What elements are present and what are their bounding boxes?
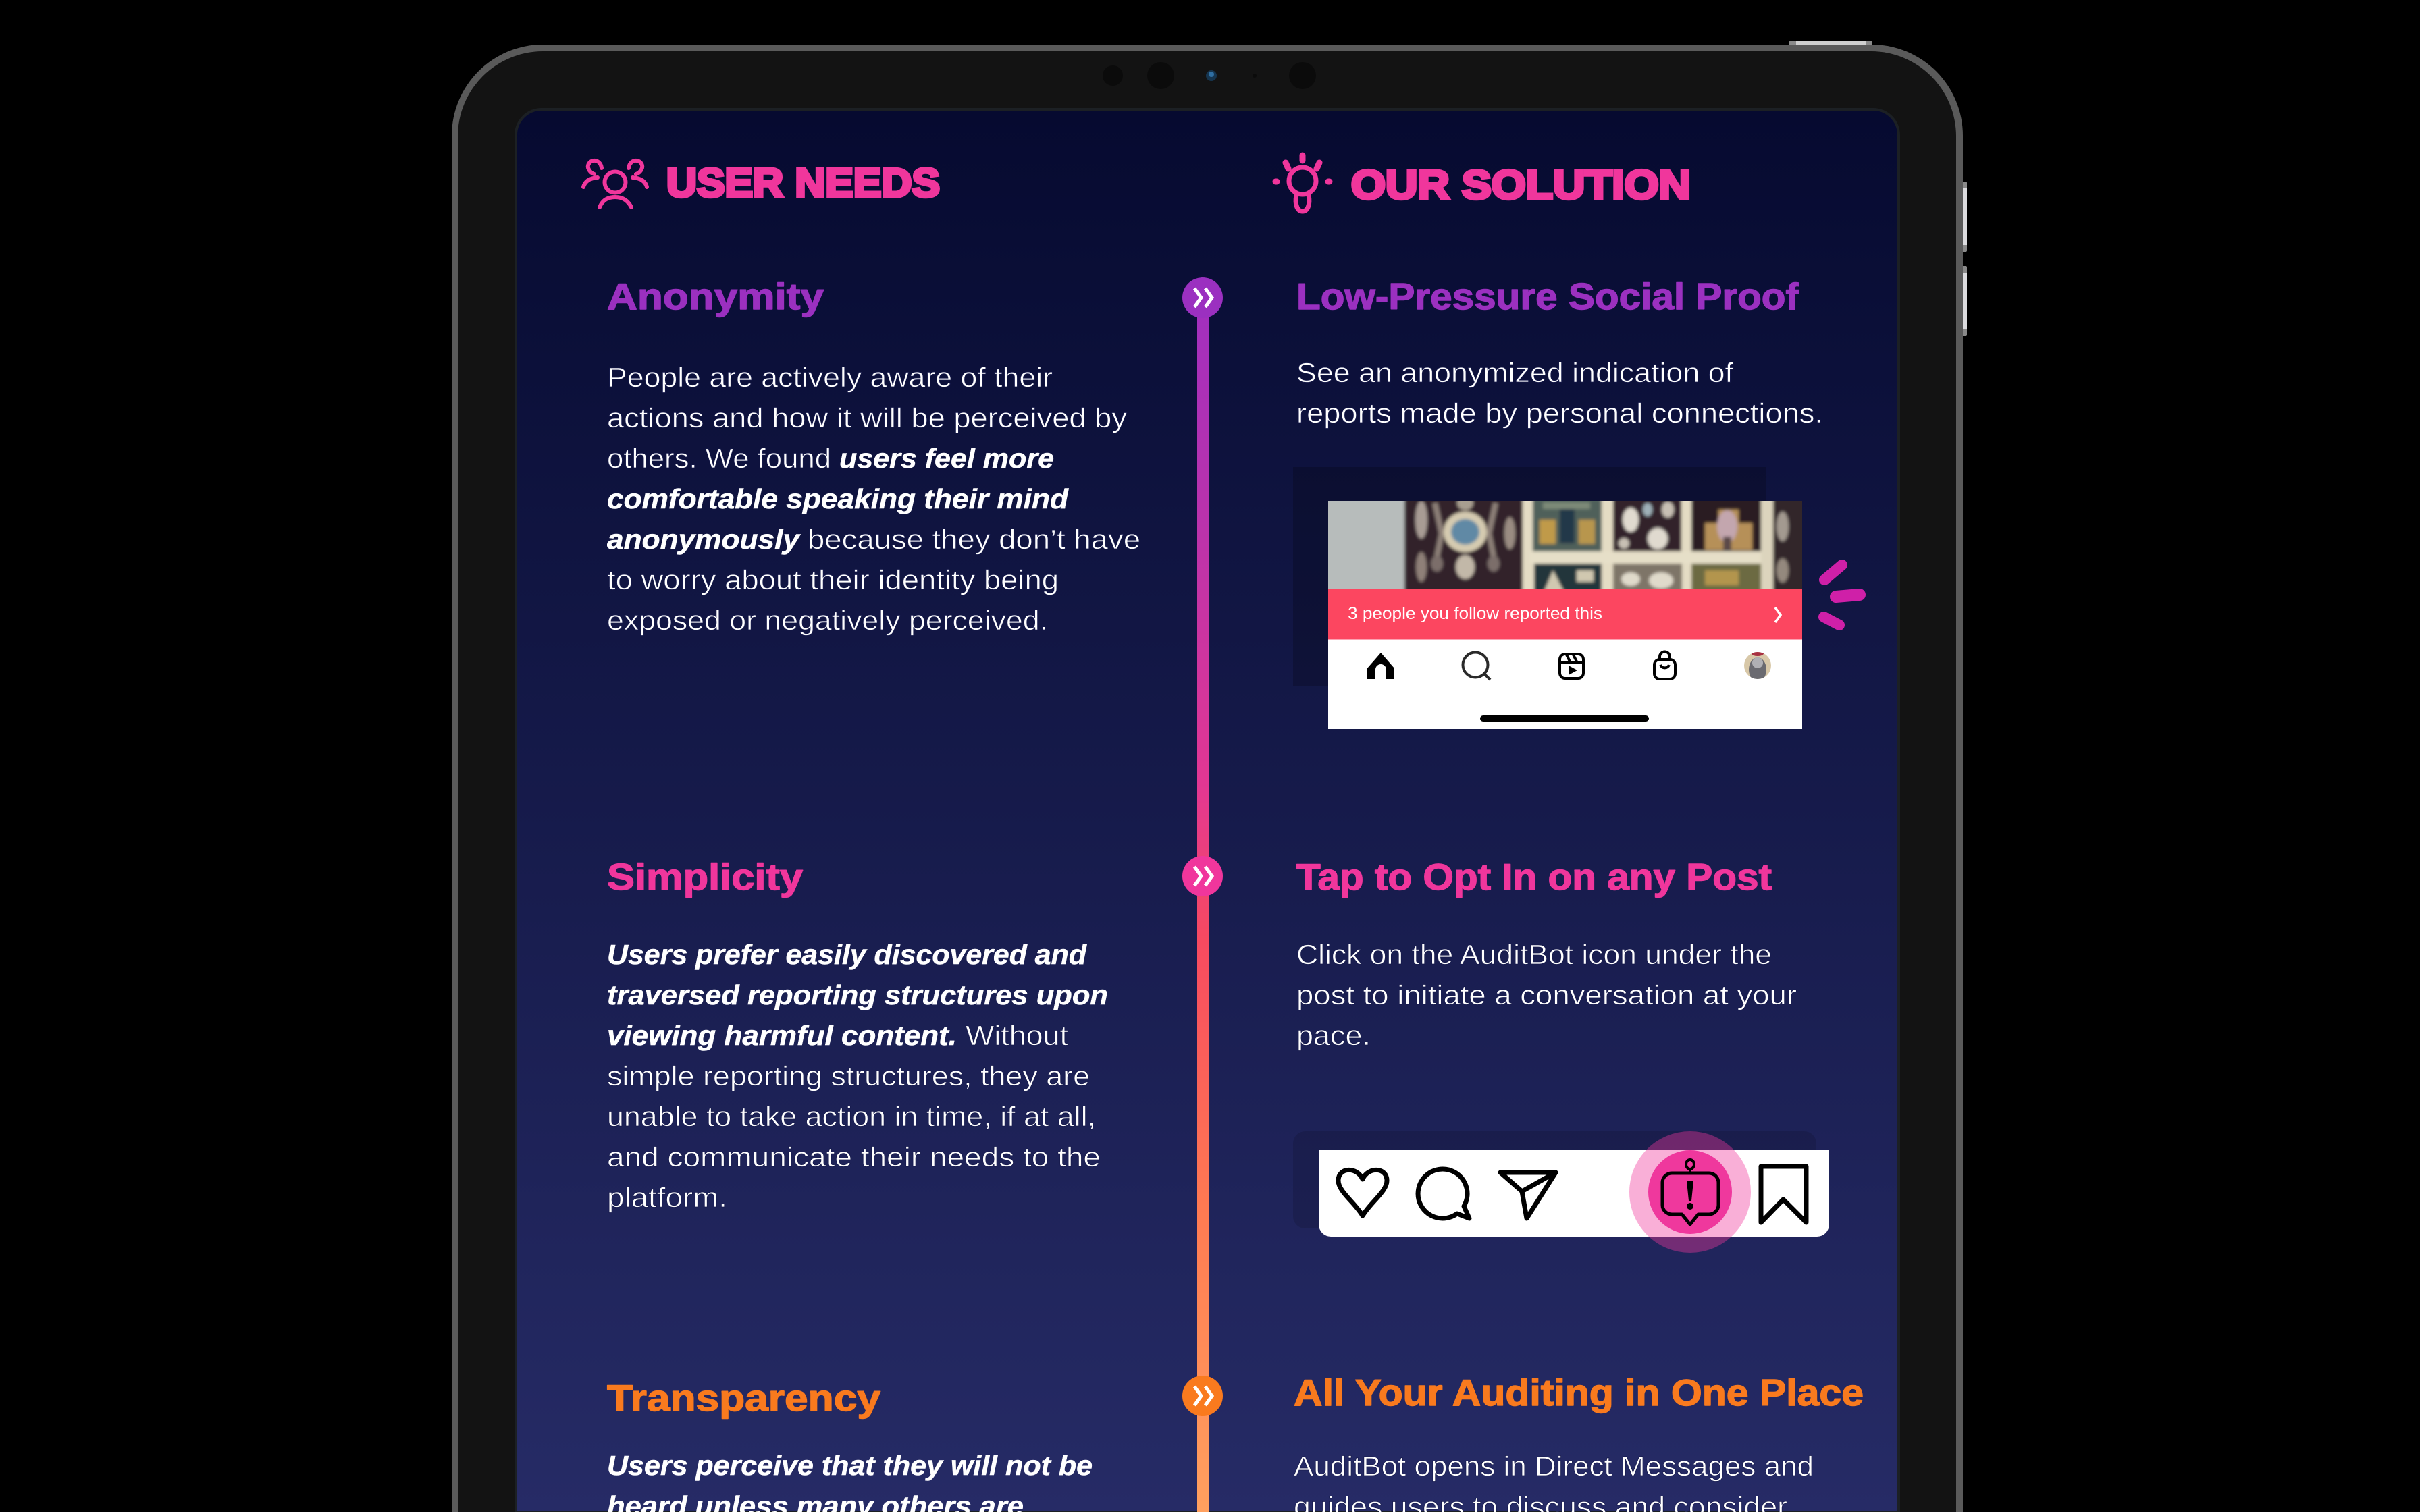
icon: shop: [1654, 652, 1675, 679]
header: our solution: [1275, 155, 1691, 211]
header: user needs: [583, 161, 940, 207]
icon: search: [1463, 652, 1490, 680]
text block: transparency: Users perceive that they will not be: [607, 1450, 1093, 1481]
text block: social proof description: reports made by personal connections.: [1296, 398, 1823, 429]
text block: anonymity: [607, 362, 1140, 636]
heading: all your auditing in one place: All Your Auditing in One Place: [1294, 1372, 1864, 1413]
icon: group of users: [583, 161, 647, 207]
highlight circle: [1648, 1150, 1732, 1234]
decorative sparks: [1824, 565, 1860, 625]
icon: auditbot alert: [1662, 1160, 1718, 1224]
heading: our solution: OUR SOLUTION: [1351, 162, 1691, 208]
icon: send: [1500, 1172, 1556, 1218]
side and top hardware buttons: [1789, 40, 1967, 336]
text block: opt in description: post to initiate a conversation at your: [1296, 979, 1797, 1010]
toolbar shadow: [1293, 1131, 1816, 1228]
text block: anonymity: others. We found: [607, 443, 831, 474]
text block: simplicity: [607, 939, 1108, 1213]
heading: simplicity: Simplicity: [607, 856, 803, 898]
tablet device frame: [452, 40, 1967, 1512]
text block: opt in description: pace.: [1296, 1020, 1371, 1051]
panel: tap to opt in: [1293, 856, 1829, 1253]
panel: simplicity need: [607, 856, 1108, 1213]
text block: anonymity: exposed or negatively perceived.: [607, 605, 1048, 636]
heading: low-pressure social proof: Low-Pressure Social Proof: [1296, 275, 1799, 317]
icon: bookmark: [1761, 1166, 1806, 1222]
icon: profile avatar: [1744, 652, 1771, 679]
text block: auditing description: [1294, 1451, 1814, 1512]
icon: reels: [1560, 654, 1583, 678]
icon: light bulb: [1275, 155, 1330, 211]
marker: pink chevrons: [1182, 856, 1223, 896]
heading: anonymity: Anonymity: [607, 275, 824, 317]
marker: orange chevrons: [1182, 1376, 1223, 1416]
text block: simplicity: platform.: [607, 1182, 727, 1213]
text block: social proof description: See an anonymized indication of: [1296, 357, 1734, 388]
text block: simplicity: and communicate their needs to the: [607, 1141, 1101, 1172]
camera sensors: [1103, 62, 1316, 89]
timeline line: [1197, 298, 1209, 1512]
icon: comment: [1418, 1169, 1469, 1218]
text block: auditing description: AuditBot opens in Direct Messages and: [1294, 1451, 1814, 1482]
timeline: [1182, 277, 1223, 1512]
marker: purple chevrons: [1182, 277, 1223, 318]
icon: heart: [1338, 1170, 1387, 1216]
text block: opt in description: Click on the AuditBot icon under the: [1296, 939, 1772, 970]
panel: all your auditing: [1294, 1372, 1864, 1512]
text block: anonymity: actions and how it will be perceived by: [607, 402, 1128, 433]
panel: anonymity need: [607, 275, 1140, 636]
text block: anonymity: users feel more: [839, 443, 1054, 474]
heading: transparency: Transparency: [607, 1377, 880, 1419]
text block: transparency: [607, 1450, 1093, 1512]
heading: tap to opt in: Tap to Opt In on any Post: [1296, 856, 1772, 898]
screen: [516, 109, 1899, 1512]
text block: simplicity: Users prefer easily discovered and: [607, 939, 1087, 970]
report banner: [1328, 589, 1802, 640]
screenshot shadow: [1293, 467, 1766, 686]
text block: simplicity: Without: [966, 1020, 1069, 1051]
text block: anonymity: People are actively aware of their: [607, 362, 1053, 393]
text block: simplicity: simple reporting structures, they are: [607, 1060, 1090, 1091]
report banner: 3 people you follow reported this: [1348, 604, 1602, 623]
text block: simplicity: traversed reporting structures upon: [607, 979, 1108, 1010]
screenshot: post action bar: [1319, 1131, 1829, 1253]
text block: opt in description: [1296, 939, 1797, 1051]
heading: user needs: USER NEEDS: [666, 161, 940, 205]
panel: transparency need: [607, 1377, 1093, 1512]
text block: anonymity: because they don’t have: [808, 524, 1140, 555]
text block: anonymity: comfortable speaking their mind: [607, 483, 1069, 514]
text block: simplicity: viewing harmful content.: [607, 1020, 957, 1051]
icon: home: [1367, 653, 1394, 679]
text block: anonymity: anonymously: [607, 524, 801, 555]
text block: simplicity: unable to take action in time, if at all,: [607, 1101, 1096, 1132]
panel: low-pressure social proof: [1293, 275, 1860, 729]
device body: [452, 45, 1963, 1512]
highlight halo: [1629, 1131, 1751, 1253]
photo: patterned carpet: [1328, 501, 1802, 589]
text block: social proof description: [1296, 357, 1823, 429]
screenshot: post with report banner: [1323, 495, 1810, 729]
bezel: [458, 51, 1956, 1512]
home indicator: [1480, 716, 1649, 722]
text block: anonymity: to worry about their identity being: [607, 564, 1059, 595]
